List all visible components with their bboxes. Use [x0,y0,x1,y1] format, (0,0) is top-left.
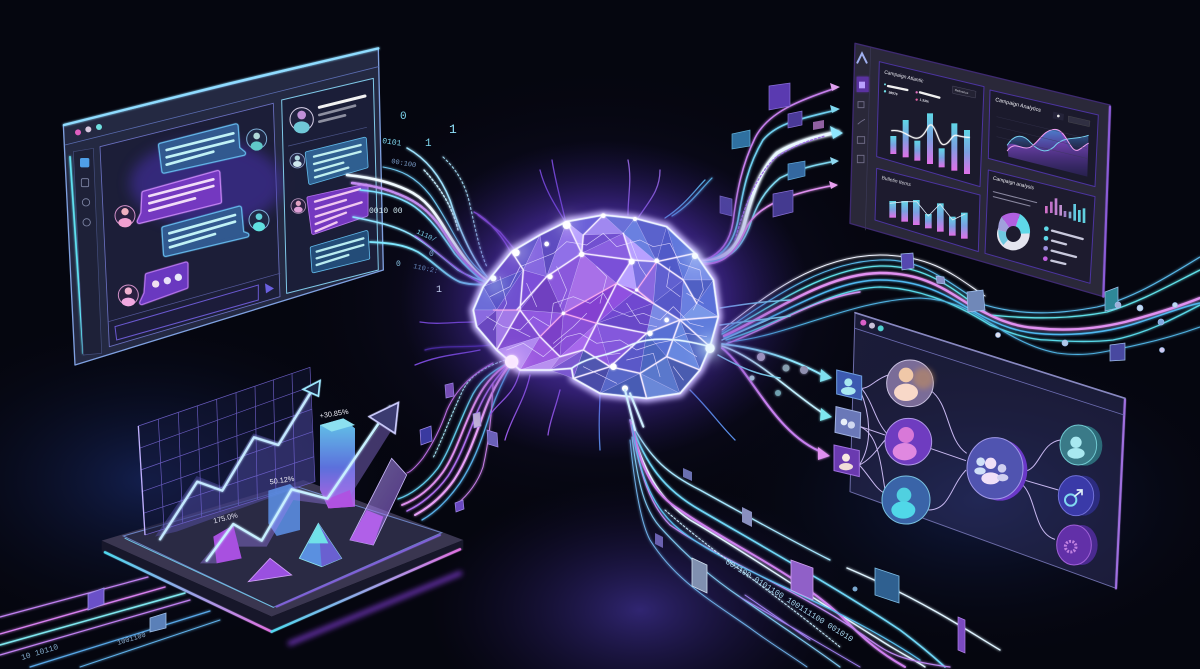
flow band: brain to platform [398,345,512,520]
flow lines: chat to brain [347,148,515,286]
chat bubble blue 2 [164,208,269,254]
rising arrow front [200,403,398,563]
network frame [850,313,1125,588]
tall bar with value [319,407,355,508]
binary digits near chat: 1110/ [415,228,437,245]
tall bar with value: +30.85% [319,407,350,420]
grid wall [138,367,315,535]
chart panel: campaign metrics: Reference [954,88,969,95]
binary digits near chat: 00:100 [390,158,417,170]
chat bubble blue 1 [161,126,267,171]
sidebar icons [73,148,102,355]
chart panel: campaign analysis donut: Campaign analysis [992,175,1035,192]
bottom left cards and digits [20,588,166,663]
data cards and arrowheads on dashboard arrows [720,83,843,217]
binary digits near chat: 110:2: [412,263,439,276]
binary digits near chat: 0 [429,250,434,259]
flow band: long wave to the right [722,255,1200,354]
pyramid [299,523,342,567]
bottom left cards and digits: 1001100 [117,632,147,648]
brain facets [473,215,718,398]
source squares [834,370,862,477]
data cards near platform stream [420,383,498,512]
flow lines: brain to dashboard [672,88,838,264]
connector lines [859,375,1060,539]
panel frame [63,48,383,365]
fine mesh veins [487,233,707,383]
small block with value: 50.12% [269,474,295,486]
flow band: brain to lower right [630,420,1000,667]
flow band: bottom left stream [0,577,220,667]
binary digits near chat [369,111,457,296]
chart panel: bulletin items: Bulletin Items [881,175,912,188]
segment orbs left [882,360,934,524]
small block with value [268,474,300,536]
chart panel: campaign metrics: 98976 [888,90,898,96]
rising arrow front: 175.0% [212,510,239,525]
chart panel: campaign metrics: Campaign Atlantic [884,69,925,85]
binary digits near chat: 1 [436,285,442,296]
rising arrow rear [155,381,320,539]
central audience hub [967,438,1027,501]
panel: campaign analytics dashboard [850,43,1110,297]
typing bubble [118,264,186,306]
main conversation pane [100,103,283,347]
central glowing brain [400,140,810,460]
bottom left cards and digits: 10 10110 [20,643,60,663]
binary digits near chat: 0 [396,260,401,269]
binary digits and data cards on lower flow: 00/100 0101100 100111100 001010 [723,558,855,645]
binary digits near chat: 0101 [382,137,402,149]
panel: growth chart platform [102,367,463,643]
binary digits near chat: 1 [425,138,432,150]
right message list [282,78,378,293]
brain stem [625,390,643,430]
chart panel: campaign analysis donut [985,170,1095,283]
binary digits near chat: 1 [449,122,457,137]
brain spark glows [489,219,719,370]
chat bubble purple 1 [115,173,219,227]
bright neural veins [473,215,718,398]
flow lines: brain to audience squares [722,344,832,460]
filaments around brain [415,160,790,450]
chart panel: campaign metrics [877,62,984,187]
bright nodes [490,213,715,391]
chart panel: bulletin items [875,168,980,252]
panel: audience segmentation network [834,313,1125,588]
dashboard frame [850,43,1110,297]
chart panel: campaign metrics: 1.33% [919,98,929,104]
chart panel: campaign analytics area [988,90,1098,187]
data cards on wave [901,253,1178,361]
chart panel: campaign analytics area: Campaign Analytics [995,97,1042,114]
binary digits near chat: 0 [400,111,407,123]
panel: chat window [63,48,383,365]
output orbs right [1057,425,1102,565]
binary digits and data cards on lower flow [655,468,965,653]
binary digits near chat: 0010 00 [369,207,403,216]
prism [350,458,407,545]
small triangle [248,558,292,582]
platform base [102,480,463,643]
brain body [473,213,718,430]
